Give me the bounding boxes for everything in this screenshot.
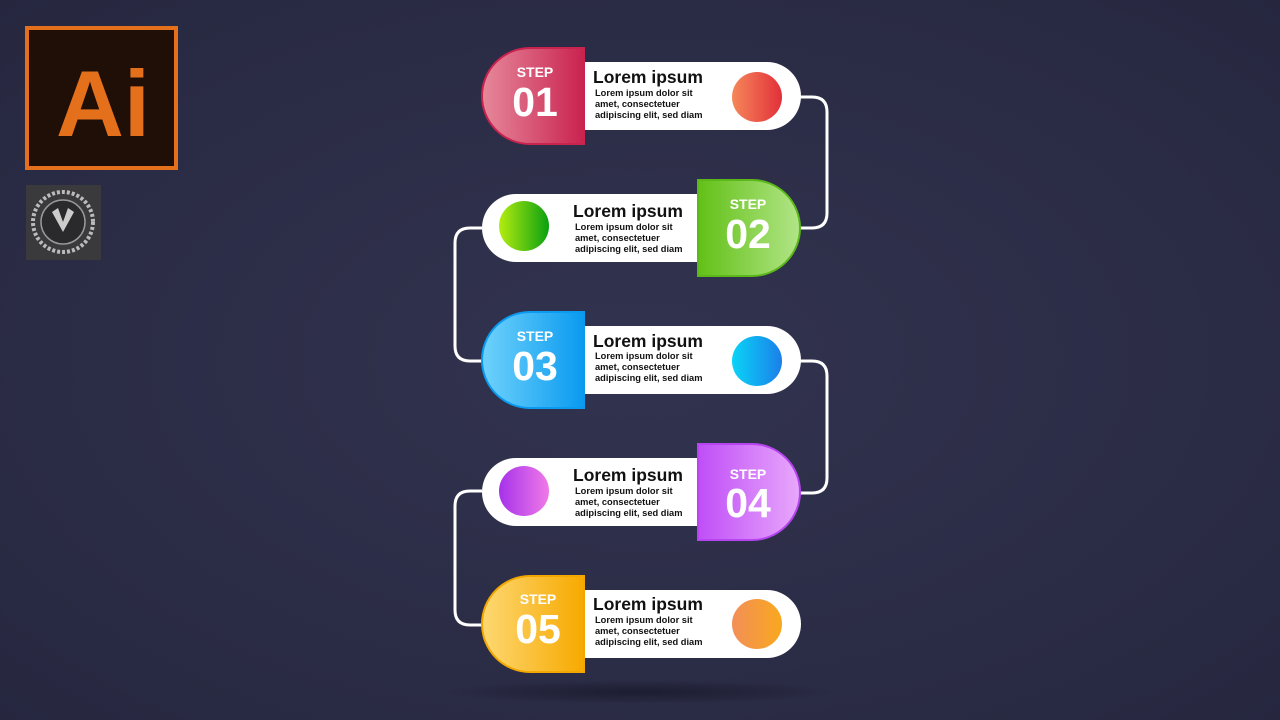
icon: Adobe Illustrator logo: Ai [56, 51, 150, 156]
step 05: amet, consectetuer [595, 626, 680, 636]
icon: emblem logo [26, 185, 101, 260]
step 05: STEP [520, 591, 556, 607]
step 01 [482, 48, 801, 144]
step 03: adipiscing elit, sed diam [595, 373, 702, 383]
step 02: adipiscing elit, sed diam [575, 244, 682, 254]
step 01: adipiscing elit, sed diam [595, 110, 702, 120]
step 01: Lorem ipsum [593, 67, 703, 87]
step 02: amet, consectetuer [575, 233, 660, 243]
step 05 [482, 576, 801, 672]
step 03: STEP [517, 328, 553, 344]
step 03: 03 [512, 343, 558, 389]
step 01: amet, consectetuer [595, 99, 680, 109]
step 04: adipiscing elit, sed diam [575, 508, 682, 518]
step 02: 02 [725, 211, 771, 257]
step 02: Lorem ipsum dolor sit [575, 222, 673, 232]
step 05: 05 [515, 606, 561, 652]
step 03: Lorem ipsum [593, 331, 703, 351]
step 02: Lorem ipsum [573, 201, 683, 221]
step 02: STEP [730, 196, 766, 212]
step 05: adipiscing elit, sed diam [595, 637, 702, 647]
step 04: Lorem ipsum dolor sit [575, 486, 673, 496]
step 05: Lorem ipsum [593, 594, 703, 614]
step 05: Lorem ipsum dolor sit [595, 615, 693, 625]
icon: Adobe Illustrator logo [27, 28, 176, 168]
step 03 [482, 312, 801, 408]
step 03: amet, consectetuer [595, 362, 680, 372]
step 03: Lorem ipsum dolor sit [595, 351, 693, 361]
step 01: STEP [517, 64, 553, 80]
step 04: amet, consectetuer [575, 497, 660, 507]
step 04 [482, 444, 800, 540]
step 04: 04 [725, 480, 771, 526]
step 01: 01 [512, 79, 558, 125]
step 04: Lorem ipsum [573, 465, 683, 485]
shadow [445, 680, 835, 704]
step 04: STEP [730, 466, 766, 482]
step 01: Lorem ipsum dolor sit [595, 88, 693, 98]
step 02 [482, 180, 800, 276]
connectors [455, 97, 827, 625]
